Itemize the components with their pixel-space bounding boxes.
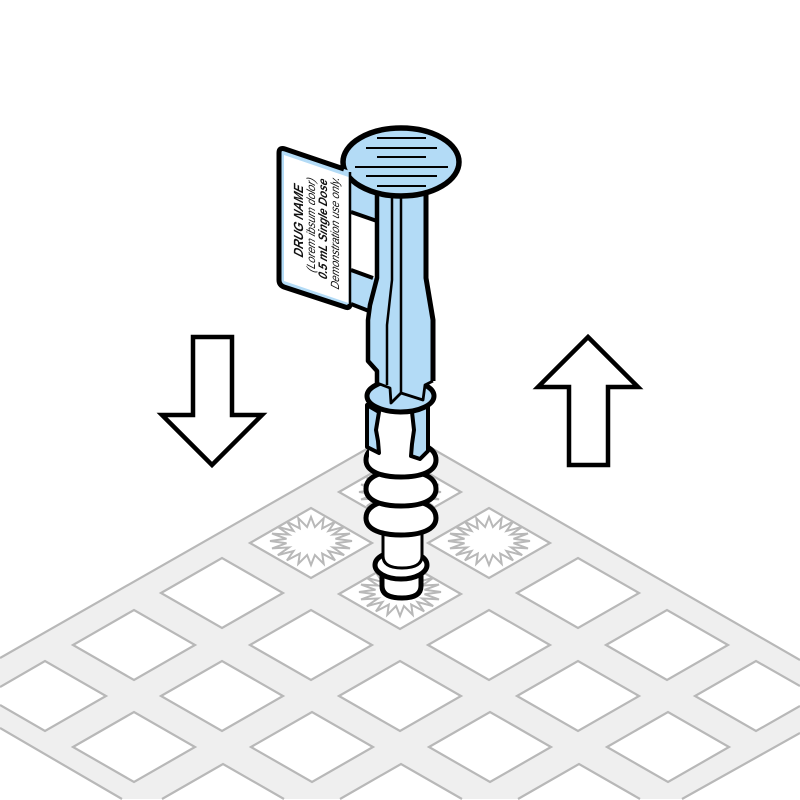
left lower arm: [367, 405, 379, 453]
label details: [305, 174, 342, 291]
spring interior: [369, 405, 427, 457]
rear connector arms: [350, 175, 378, 312]
down arrow: [162, 337, 262, 465]
cap: [343, 128, 459, 196]
collar ring: [367, 380, 434, 412]
label details: 0.5 mL Single Dose: [316, 176, 330, 281]
up arrow: [538, 337, 638, 465]
plunger ridge: [387, 190, 401, 393]
isometric tray platform: [0, 430, 800, 799]
needle upper section: [383, 530, 422, 568]
right lower arm: [411, 405, 428, 459]
tray cells: [0, 457, 800, 799]
needle tip lower section: [382, 565, 421, 598]
starburst marks: [270, 468, 530, 616]
spring coils: [366, 442, 436, 535]
needle collar: [375, 551, 427, 579]
label details: Demonstration use only.: [329, 174, 342, 291]
label details: (Lorem ibsum dolor): [305, 175, 318, 274]
label title: DRUG NAME: [291, 181, 306, 259]
plunger body: [368, 185, 433, 403]
injector device: [343, 128, 459, 598]
drug label: [279, 148, 350, 308]
